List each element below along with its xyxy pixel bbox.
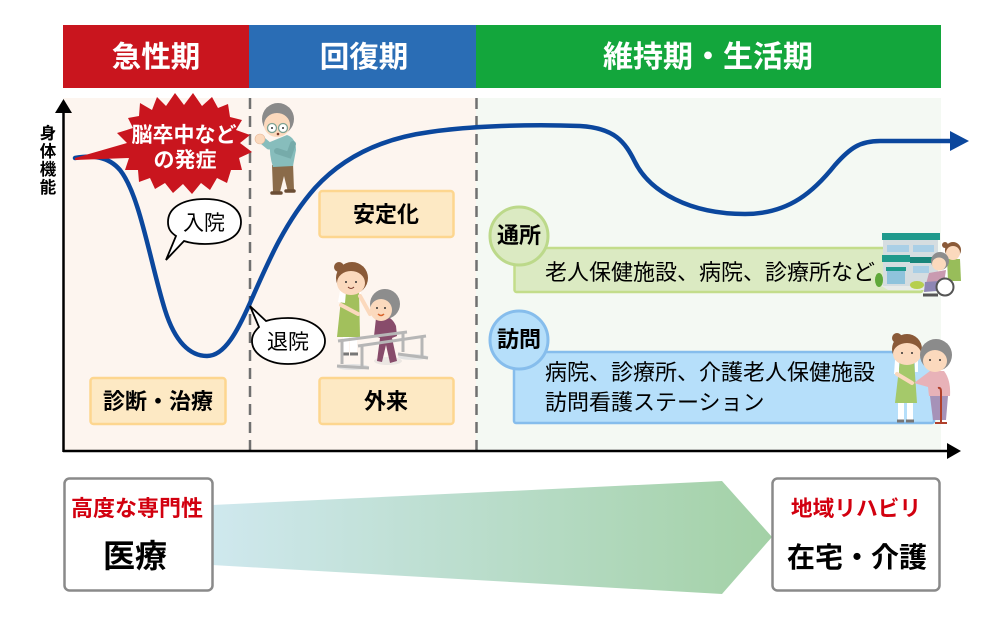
speech bubble: discharge: 退院: [267, 331, 309, 354]
phase header: maintenance and daily life: [476, 25, 941, 88]
phase header: maintenance and daily life: 維持期・生活期: [603, 41, 813, 74]
label box: diagnosis and treatment: 診断・治療: [103, 389, 213, 414]
axis label: physical function: [40, 124, 57, 197]
axis label: physical function: 体: [40, 142, 57, 161]
phase divider lines: [250, 98, 476, 451]
icon: care facility with wheelchair user: [875, 233, 961, 296]
label box: stabilization: 安定化: [353, 202, 419, 227]
badge: day care: 通所: [497, 223, 541, 248]
callout: stroke onset burst: 脳卒中など: [132, 124, 236, 147]
phase header: acute: 急性期: [112, 41, 200, 74]
box: medical care: [64, 478, 212, 590]
box: home and nursing care: 在宅・介護: [787, 542, 927, 573]
icon: carer helping patient on parallel bars: [334, 262, 428, 370]
service row: home visit: [514, 352, 934, 423]
recovery curve: [75, 125, 969, 356]
phase header: acute: [63, 25, 249, 88]
service row: home visit: 訪問看護ステーション: [545, 390, 765, 415]
badge: home visit: [490, 311, 548, 369]
axis label: physical function: 機: [40, 160, 57, 179]
box: home and nursing care: 地域リハビリ: [791, 496, 921, 521]
chart background: maintenance phase: [476, 98, 941, 451]
label box: stabilization: [320, 191, 454, 237]
phase header: recovery: [249, 25, 476, 88]
horizontal axis: time: [63, 443, 961, 459]
badge: day care: [490, 207, 548, 265]
service row: day care: [514, 248, 922, 292]
box: medical care: 医療: [103, 538, 167, 574]
service row: day care: 老人保健施設、病院、診療所など: [545, 260, 875, 285]
flow arrow from medical to community care: [212, 481, 772, 594]
box: medical care: 高度な専門性: [71, 496, 203, 521]
speech bubble: admission: [166, 199, 241, 260]
label box: diagnosis and treatment: [90, 378, 226, 424]
callout: stroke onset burst: [75, 93, 252, 194]
label box: outpatient: [320, 378, 454, 424]
axis label: physical function: 能: [40, 177, 57, 197]
box: home and nursing care: [772, 478, 940, 590]
callout: stroke onset burst: の発症: [154, 149, 216, 172]
vertical axis: physical function: [55, 99, 72, 452]
label box: outpatient: 外来: [364, 389, 408, 414]
axis label: physical function: 身: [40, 124, 56, 143]
service row: home visit: 病院、診療所、介護老人保健施設: [545, 360, 875, 385]
phase header: recovery: 回復期: [320, 41, 408, 74]
badge: home visit: 訪問: [497, 327, 541, 352]
icon: elderly man with stroke symptoms: [255, 103, 296, 193]
chart background: acute and recovery phases: [63, 98, 476, 451]
speech bubble: discharge: [250, 306, 325, 364]
icon: carer holding hands with elderly woman: [892, 333, 952, 423]
speech bubble: admission: 入院: [183, 212, 225, 235]
